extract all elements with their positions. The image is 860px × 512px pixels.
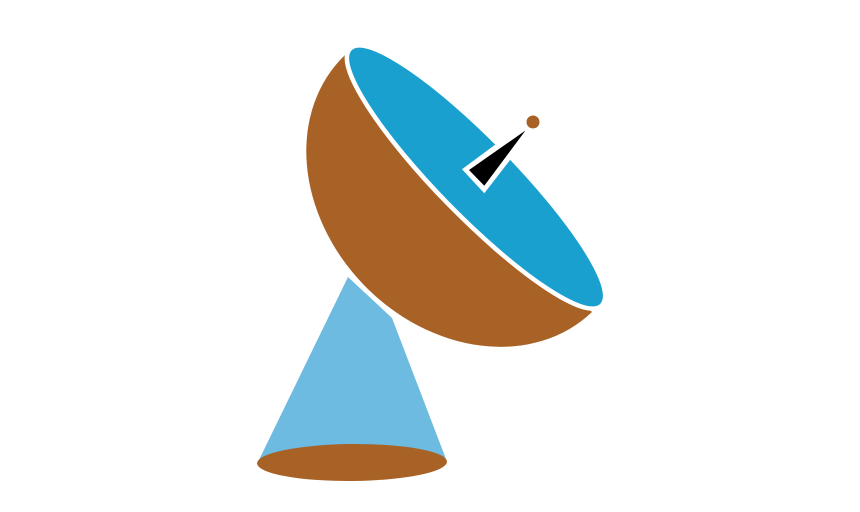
dish bowl (306, 55, 592, 347)
dish (306, 25, 626, 347)
antenna feed (462, 98, 558, 193)
cone body (257, 277, 446, 464)
dish face (326, 25, 626, 329)
feed outline (462, 98, 558, 193)
stand: cone base (257, 277, 447, 482)
feed arm (469, 130, 526, 186)
base ellipse (257, 443, 447, 482)
feed tip (526, 116, 540, 128)
